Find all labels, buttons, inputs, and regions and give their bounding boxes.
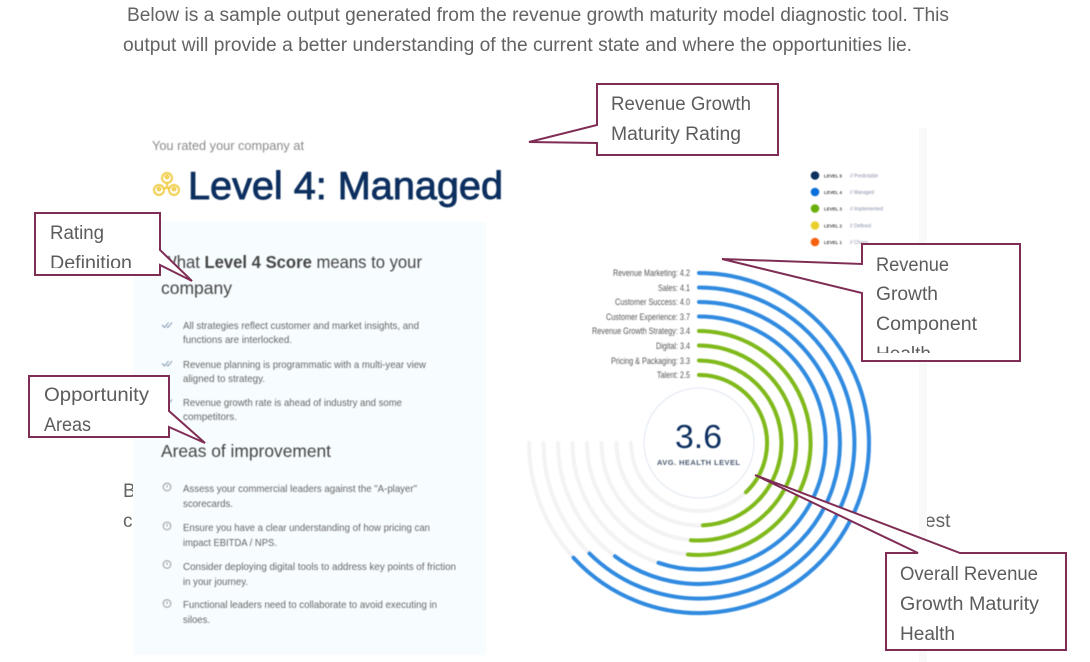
callout: opportunity areas <box>29 376 205 443</box>
callout: component health <box>722 244 1020 365</box>
heading: areas of improvement: Areas of improvement <box>161 441 331 461</box>
legend: // Defined <box>850 224 871 230</box>
chart value arcs <box>574 273 869 613</box>
improvement list: siloes. <box>183 615 210 626</box>
chart component labels: Digital: 3.4 <box>656 341 690 351</box>
legend: // Implemented <box>850 206 883 212</box>
legend: LEVEL 3 <box>824 206 842 212</box>
improvement list: Consider deploying digital tools to address key points of friction <box>183 562 456 573</box>
callout: maturity rating <box>529 84 778 155</box>
center score ring <box>644 388 754 498</box>
partly hidden background text: est <box>925 511 951 532</box>
strengths list: Revenue planning is programmatic with a multi-year view <box>183 360 427 371</box>
intro text: output will provide a better understanding of the current state and where the opportunities lie. <box>123 35 912 56</box>
chart component labels: Customer Experience: 3.7 <box>606 312 690 322</box>
sample report backdrop <box>133 128 919 662</box>
legend: LEVEL 4 <box>824 190 842 195</box>
chart component labels: Customer Success: 4.0 <box>615 297 690 307</box>
legend: LEVEL 1 <box>824 240 842 245</box>
improvement list: Assess your commercial leaders against the "A-player" <box>183 484 417 495</box>
improvement list: scorecards. <box>183 499 233 510</box>
chart component labels: Sales: 4.1 <box>658 283 690 293</box>
callout: overall health: Growth Maturity <box>900 594 1040 615</box>
strengths list: aligned to strategy. <box>183 374 265 385</box>
legend: LEVEL 2 <box>824 224 842 228</box>
callout: rating definition <box>35 213 192 281</box>
chart component labels: Revenue Marketing: 4.2 <box>613 268 690 278</box>
callout: rating definition: Rating <box>50 223 104 244</box>
chart component labels: Pricing & Packaging: 3.3 <box>611 356 690 366</box>
icon: level network <box>154 173 179 195</box>
improvement list: impact EBITDA / NPS. <box>183 538 277 549</box>
legend <box>811 171 883 246</box>
strengths list <box>183 321 427 423</box>
strengths list: Revenue growth rate is ahead of industry and some <box>183 398 402 409</box>
intro text: Below is a sample output generated from the revenue growth maturity model diagnostic tool. This <box>127 5 949 26</box>
center score: 3.6 <box>675 418 722 455</box>
partly hidden background text <box>123 481 951 532</box>
callout: overall health: Health <box>900 624 955 645</box>
improvement list: Functional leaders need to collaborate to avoid executing in <box>183 600 437 611</box>
callout: maturity rating: Revenue Growth <box>611 94 751 115</box>
right edge strip <box>919 128 927 662</box>
strengths list: functions are interlocked. <box>183 335 292 346</box>
chart component labels: Talent: 2.5 <box>657 370 690 380</box>
callout: component health: Growth <box>876 284 938 305</box>
panel: rating definition and improvement <box>134 222 486 655</box>
heading: score meaning: What Level 4 Score means to your <box>161 252 422 272</box>
rating title: Level 4: Managed <box>188 165 503 208</box>
callout: opportunity areas: Areas <box>44 415 91 436</box>
callout: overall health: Overall Revenue <box>900 564 1038 585</box>
center score caption: AVG. HEALTH LEVEL <box>657 458 740 467</box>
partly hidden background text: B <box>123 481 136 502</box>
strengths list: competitors. <box>183 412 237 423</box>
callout: component health: Revenue <box>876 255 949 276</box>
legend: // Chaos <box>850 240 868 246</box>
callout: component health: Component <box>876 314 978 335</box>
strengths list: All strategies reflect customer and market insights, and <box>183 321 419 332</box>
improvement list <box>183 484 456 626</box>
callout: maturity rating: Maturity Rating <box>611 124 741 145</box>
partly hidden background text: c <box>123 511 132 532</box>
improvement list: Ensure you have a clear understanding of how pricing can <box>183 523 430 534</box>
legend: // Predictable <box>850 174 878 180</box>
legend: LEVEL 5 <box>824 174 842 178</box>
callout: opportunity areas: Opportunity <box>44 385 150 406</box>
callout: overall health <box>755 475 1066 650</box>
chart tracks <box>529 273 869 613</box>
rating header <box>152 139 503 208</box>
improvement list: in your journey. <box>183 577 248 588</box>
callout: rating definition: Definition <box>50 253 132 274</box>
icons: clock markers <box>163 483 171 607</box>
chart component labels <box>592 268 690 380</box>
intro text <box>123 5 949 56</box>
rating intro line: You rated your company at <box>152 139 305 153</box>
legend: // Managed <box>850 190 874 196</box>
chart component labels: Revenue Growth Strategy: 3.4 <box>592 326 690 336</box>
icons: double check marks <box>162 322 172 404</box>
radial health chart <box>529 268 869 613</box>
panel: rating definition and improvement: company <box>161 278 232 298</box>
callout: component health: Health <box>876 344 931 365</box>
